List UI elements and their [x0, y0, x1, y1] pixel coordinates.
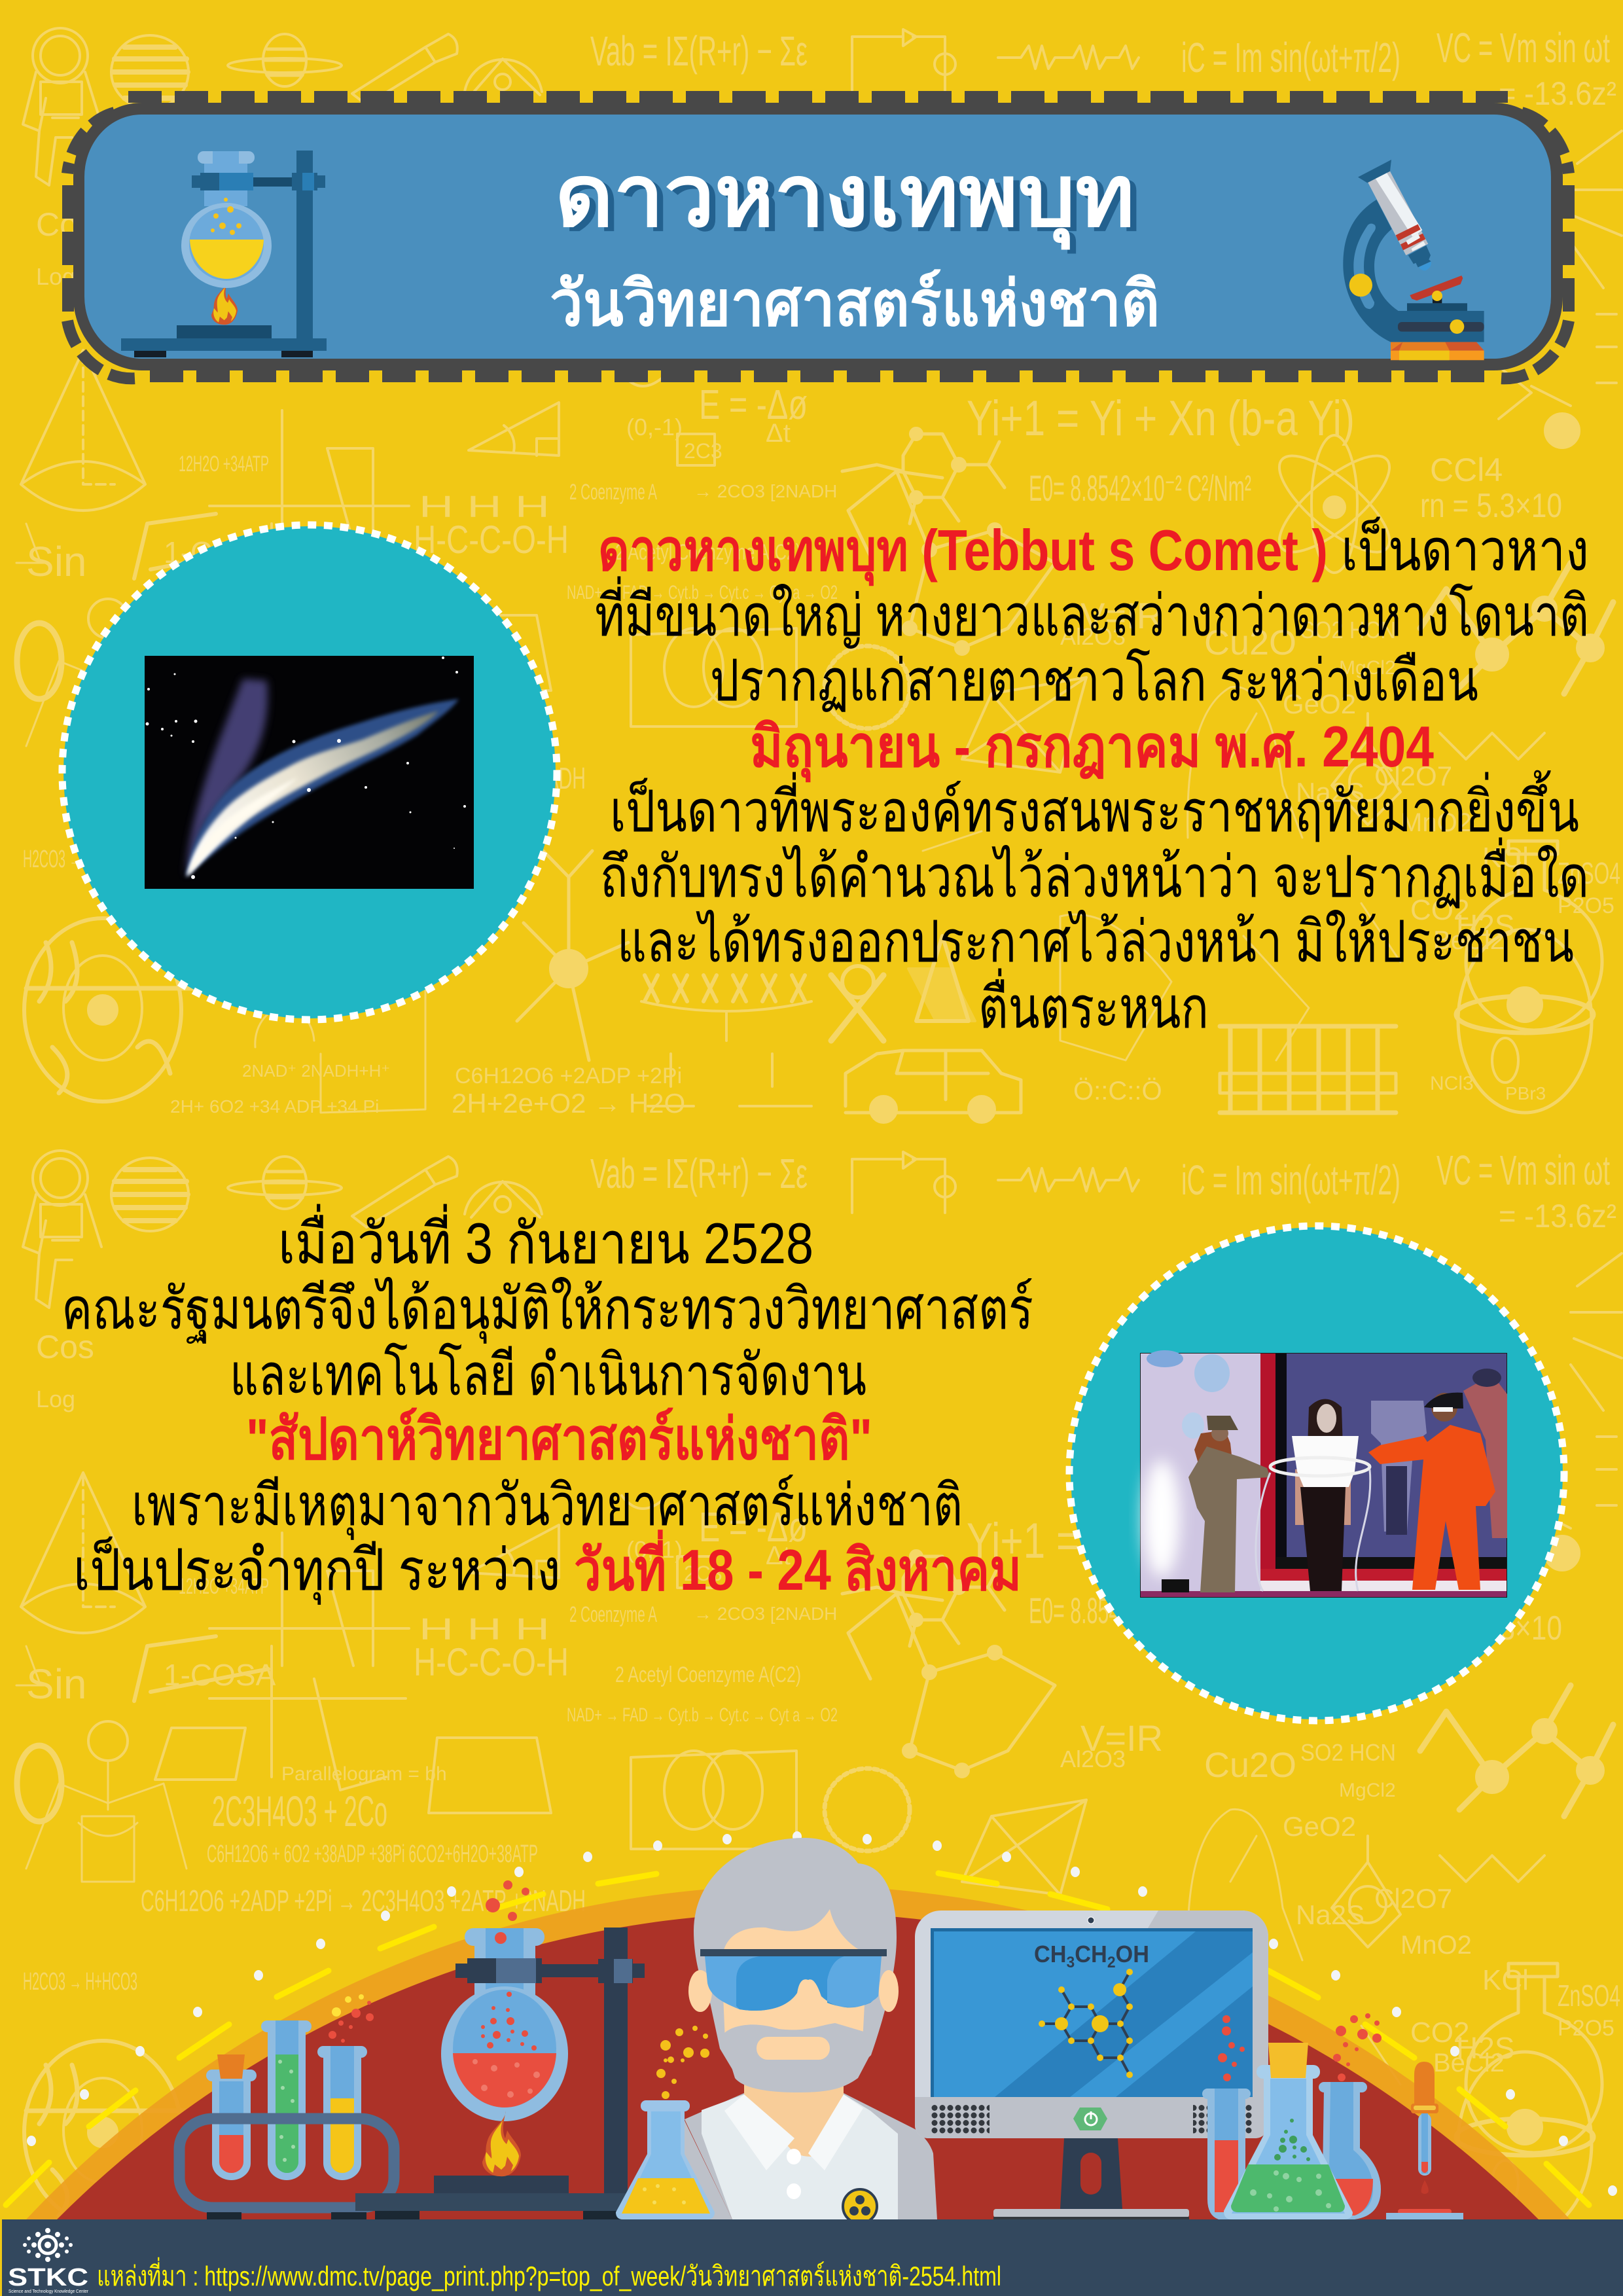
background formulas: bottom tile: iC = Im sin(ωt+π/2) [1181, 1157, 1400, 1204]
text block: science week history: และเทคโนโลยี ดำเนินการจัดงาน [230, 1342, 866, 1407]
subtitle: วันวิทยาศาสตร์แห่งชาติ [550, 269, 1160, 339]
bottom lab scene [6, 1831, 1617, 2223]
logo wordmark: STKC [8, 2264, 88, 2291]
panel: comet photo circle [62, 525, 557, 1020]
background formulas: top tile: H H H [419, 490, 550, 524]
test tube: green [261, 2020, 312, 2180]
logo emblem [23, 2228, 73, 2262]
background formulas: top tile: E = -Δø [699, 381, 808, 428]
bubbles above round flask [486, 1880, 529, 1921]
background formulas: top tile: MgCl2 [1339, 657, 1396, 679]
formula: ethanol: CH [1075, 1941, 1107, 1967]
background formulas: bottom tile: Na2S [1296, 1899, 1364, 1930]
logo: STKC [8, 2228, 89, 2294]
bubbles: yellow above flask [656, 2026, 709, 2099]
text block: science week history: เป็นประจำทุกปี ระหว่าง วันที่ 18 - 24 สิงหาคม [73, 1530, 1022, 1605]
scientist beard [722, 2023, 871, 2092]
background formulas: bottom tile: Vab = IΣ(R+r) − Σε [590, 1150, 808, 1197]
person in white shirt [1256, 1399, 1370, 1591]
text block: comet description: ดาวหางเทพบุท (Tebbut s Comet ) เป็นดาวหาง [598, 516, 1589, 586]
flask group: right [1202, 2043, 1463, 2219]
background formulas: top tile: 2 Acetyl Coenzyme A(C2) [615, 540, 801, 565]
bubbles: red above right flasks [1218, 2013, 1382, 2081]
background formulas: bottom tile: Cos [36, 1329, 94, 1365]
background formulas: bottom tile: Al2O3 [1060, 1746, 1126, 1772]
background formulas: bottom tile: MgCl2 [1339, 1780, 1396, 1801]
background formulas: top tile: Al2O3 [1060, 623, 1126, 650]
background formulas: bottom tile: 12H2O +34ATP [179, 1574, 269, 1599]
speaker grille: left [931, 2104, 990, 2134]
scientist collar [724, 2094, 863, 2170]
monitor screen [931, 1928, 1253, 2097]
background formulas: bottom tile: GeO2 [1283, 1811, 1356, 1842]
background formulas: top tile: Cos [36, 206, 94, 243]
background formulas: bottom tile: (0,-1) [626, 1536, 683, 1563]
background formulas: top tile: C6H12O6 +2ADP +2Pi → 2C3H4O3 +2ATP +2NADH [141, 761, 586, 795]
text block: science week history: "สัปดาห์วิทยาศาสตร์แห่งชาติ" [246, 1407, 872, 1471]
background formulas: bottom tile: C6H12O6 + 6O2 +38ADP +38Pi 6CO2+6H2O+38ATP [207, 1840, 538, 1868]
screen reflection [1371, 1369, 1507, 1538]
monitor stand [1060, 2138, 1122, 2209]
power button [1073, 2108, 1107, 2130]
background formulas: bottom tile [23, 1147, 1620, 2077]
scientist goggles [700, 1949, 887, 2011]
gear frame teeth [67, 97, 1569, 378]
decorative yellow streaks [6, 1873, 1589, 2205]
test tube rack with tubes [179, 2020, 394, 2219]
background arc: red dome [57, 1912, 1539, 2219]
scientist coat [685, 2093, 937, 2219]
dropper [1386, 2062, 1463, 2219]
computer monitor [915, 1910, 1268, 2219]
test tube: yellow [317, 2046, 367, 2180]
scientist [685, 1838, 937, 2223]
photo: Tebbutt's comet [145, 656, 474, 889]
background arc: orange band [26, 1886, 1570, 2219]
formula: ethanol: 3 [1067, 1954, 1075, 1971]
background formulas: top tile: 2C3H4O3 + 2Co [212, 664, 387, 713]
background formulas: top tile: H-C-C-O-H [414, 518, 569, 562]
source line: แหล่งที่มา : https://www.dmc.tv/page_print.php?p=top_of_week/วันวิทยาศาสตร์แห่งชาติ-2554.html [97, 2257, 1001, 2291]
icon: flame [482, 2111, 521, 2176]
text block: science week history [62, 1204, 1033, 1605]
background formulas: top tile: Na2S [1296, 777, 1364, 808]
background formulas: top tile: Sin [26, 538, 86, 585]
background formulas: bottom tile: H2S [1456, 2031, 1514, 2065]
speaker grille: right [1193, 2104, 1252, 2134]
person in brown suit [1162, 1416, 1270, 1592]
background formulas: top tile: Parallelogram = bh [281, 641, 447, 662]
formula: ethanol: 2 [1107, 1954, 1116, 1971]
background formulas: top tile: 2NAD⁺ 2NADH+H⁺ [242, 1061, 390, 1081]
background formulas: bottom tile: → 2CO3 [2NADH [694, 1604, 837, 1624]
background formulas: bottom tile: Cu2O [1204, 1746, 1296, 1785]
background formulas: bottom tile: Log [36, 1386, 75, 1412]
background formulas: bottom tile: 2 Acetyl Coenzyme A(C2) [615, 1662, 801, 1687]
background formulas: top tile [23, 24, 1620, 1119]
background formulas: bottom tile: 2 Coenzyme A [569, 1602, 657, 1627]
background formulas: bottom tile: SO2 HCN [1300, 1739, 1396, 1766]
background formulas: bottom tile: Sin [26, 1660, 86, 1708]
burner with stand and round flask [355, 1928, 645, 2219]
background formulas: top tile: Ö::C::Ö [1073, 1077, 1162, 1105]
molecule diagram [1039, 1969, 1133, 2078]
background formulas: top tile: H2CO3 → H+HCO3 [23, 846, 137, 873]
background formulas: top tile: (0,-1) [626, 414, 683, 440]
background formulas: top tile: H2S [1456, 908, 1514, 942]
bubbles: red above test tubes [329, 1994, 374, 2043]
decorative white dots [27, 1831, 1617, 2196]
background formulas: top tile: NAD+ → FAD → Cyt.b → Cyt.c → Cyt a → O2 [567, 582, 838, 603]
background formulas: top tile: C6H12O6 +2ADP +2Pi [455, 1064, 682, 1088]
icon: retort stand with flask [121, 151, 327, 357]
background formulas: top tile: 2C3 [684, 439, 722, 463]
background formulas: top tile: iC = Im sin(ωt+π/2) [1181, 34, 1400, 81]
round flask: red right [1319, 2082, 1381, 2219]
background formulas: top tile: Δt [766, 419, 791, 448]
footer bar [2, 2219, 1623, 2296]
background formulas: top tile: V=IR [1080, 595, 1163, 636]
background formulas: bottom tile: E0= 8.8542×10⁻² C²/Nm² [1029, 1590, 1251, 1631]
banner panel [84, 115, 1551, 359]
text block: science week history: คณะรัฐมนตรีจึงได้อนุมัติให้กระทรวงวิทยาศาสตร์ [62, 1276, 1033, 1344]
background formulas: top tile: PBr3 [1505, 1083, 1546, 1103]
title: ดาวหางเทพบุท [555, 148, 1135, 250]
gear frame ring [73, 103, 1563, 370]
background formulas: top tile: Cl2O7 [1374, 761, 1452, 791]
Erlenmeyer flask: green right [1224, 2043, 1353, 2219]
text block: science week history: เพราะมีเหตุมาจากวันวิทยาศาสตร์แห่งชาติ [132, 1473, 963, 1540]
scientist badge [843, 2189, 877, 2223]
background formulas: top tile: 1-COSA [164, 535, 276, 569]
background formulas: top tile: GeO2 [1283, 689, 1356, 719]
background formulas: bottom tile: 2C3 [684, 1562, 722, 1585]
background formulas: top tile: Vab = IΣ(R+r) − Σε [590, 27, 808, 75]
background formulas: top tile: Log [36, 263, 75, 290]
scientist hair [694, 1838, 897, 2081]
text block: science week history: เมื่อวันที่ 3 กันยายน 2528 [278, 1204, 813, 1276]
background formulas: bottom tile: 1-COSA [164, 1658, 276, 1692]
background formulas: bottom tile: NAD+ → FAD → Cyt.b → Cyt.c → Cyt a → O2 [567, 1704, 838, 1726]
background formulas: top tile: MnO2 [1400, 808, 1472, 837]
background formulas: bottom tile: H-C-C-O-H [414, 1640, 569, 1684]
background formulas: top tile: Yi+1 = Yi + Xn (b-a Yi) [967, 391, 1355, 446]
text block: comet description [595, 516, 1589, 1040]
background formulas: top tile: 2H+2e+O2 → H2O [452, 1088, 685, 1119]
background formulas: top tile: BeCl2 [1433, 926, 1505, 955]
background formulas: bottom tile: Yi+1 = Yi + Xn (b-a Yi) [967, 1513, 1355, 1569]
background doodles: bottom tile [16, 1151, 1622, 2245]
background formulas: top tile: rn = 5.3×10 [1420, 487, 1562, 525]
background formulas: bottom tile: CCl4 [1430, 1574, 1503, 1611]
background formulas: bottom tile: E = -Δø [699, 1503, 808, 1551]
background formulas: top tile: SO2 HCN [1300, 617, 1396, 643]
background formulas: bottom tile: Cl2O7 [1374, 1883, 1452, 1914]
formula: ethanol: OH [1116, 1941, 1149, 1967]
background formulas: top tile: Cu2O [1204, 623, 1296, 662]
background formulas: top tile: CO2 [1410, 894, 1469, 926]
background formulas: bottom tile: P2O5 [1558, 2016, 1614, 2041]
background doodles: top tile [16, 28, 1622, 1122]
test tube: red right [1202, 2089, 1251, 2219]
background formulas: top tile: 2H+ 6O2 +34 ADP +34 Pi [170, 1096, 379, 1117]
logo tagline: Science and Technology Knowledge Center [9, 2289, 89, 2294]
background formulas: top tile: E0= 8.8542×10⁻² C²/Nm² [1029, 467, 1251, 509]
text block: comet description: มิถุนายน - กรกฎาคม พ.ศ. 2404 [750, 714, 1434, 783]
background formulas: top tile: CCl4 [1430, 452, 1503, 488]
background formulas: bottom tile: V=IR [1080, 1717, 1163, 1759]
Erlenmeyer flask: yellow [616, 2100, 732, 2219]
background formulas: bottom tile: KCl [1482, 1964, 1529, 1996]
background formulas: top tile: NCl3 [1430, 1073, 1474, 1094]
formula: ethanol: CH [1034, 1941, 1068, 1967]
background formulas: top tile: 2 Coenzyme A [569, 480, 657, 505]
background formulas: top tile: C6H12O6 + 6O2 +38ADP +38Pi 6CO2+6H2O+38ATP [207, 718, 538, 745]
background formulas: bottom tile: CO2 [1410, 2017, 1469, 2049]
panel: science week photo circle [1069, 1226, 1564, 1721]
background formulas: bottom tile: H2CO3 → H+HCO3 [23, 1968, 137, 1996]
background formulas: bottom tile: Parallelogram = bh [281, 1763, 447, 1785]
background formulas: bottom tile: 2C3H4O3 + 2Co [212, 1787, 387, 1835]
monitor bezel [915, 1910, 1268, 2138]
scientist neck [744, 2075, 844, 2157]
text block: comet description: ตื่นตระหนก [978, 968, 1209, 1040]
background formulas: bottom tile: rn = 5.3×10 [1420, 1609, 1562, 1647]
test tube: red [206, 2054, 257, 2180]
background formulas: bottom tile: C6H12O6 +2ADP +2Pi → 2C3H4O3 +2ATP +2NADH [141, 1884, 586, 1918]
photo: stage bubble demonstration [1140, 1350, 1507, 1598]
header banner with gear frame [67, 97, 1569, 378]
rack frame [179, 2119, 394, 2208]
background formulas: bottom tile: BeCl2 [1433, 2049, 1505, 2077]
person in orange suit [1368, 1393, 1495, 1590]
background formulas: bottom tile: MnO2 [1400, 1931, 1472, 1960]
background formulas: top tile: P2O5 [1558, 893, 1614, 918]
icon: microscope [1343, 160, 1484, 360]
background formulas: top tile: 12H2O +34ATP [179, 452, 269, 476]
flask [474, 1937, 535, 1996]
background formulas: top tile: KCl [1482, 842, 1529, 874]
scientist face [722, 1909, 867, 2042]
background formulas: bottom tile: H H H [419, 1612, 550, 1646]
background formulas: bottom tile: Δt [766, 1541, 791, 1570]
background formulas: top tile: → 2CO3 [2NADH [694, 481, 837, 501]
